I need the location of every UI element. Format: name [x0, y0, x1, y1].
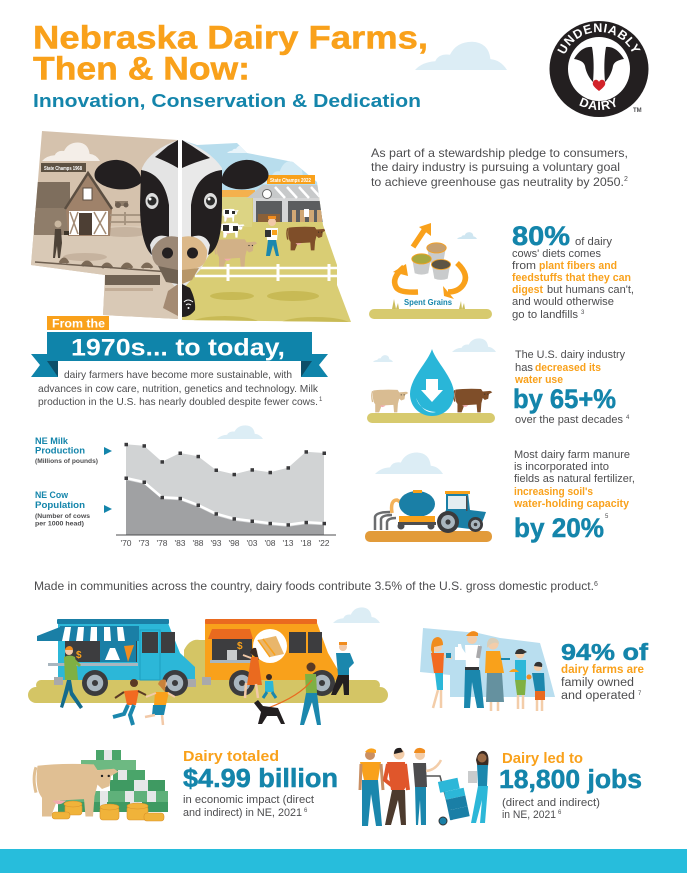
illustration: Nebraska then and now with cow: [31, 131, 351, 322]
stat: soil water-holding capacity: Most dairy farm manure: [514, 449, 630, 461]
stewardship pledge text: to achieve greenhouse gas neutrality by 2050.: [371, 175, 624, 189]
area: cows: [126, 480, 324, 535]
illustration: cow with money: [34, 750, 168, 821]
stat: 80%: from: [512, 260, 536, 272]
person: woman with clipboard: [468, 751, 488, 823]
legend: cow population: NE Cow: [35, 490, 69, 500]
stat: soil water-holding capacity: fields as natural fertilizer,: [514, 473, 635, 485]
stat: 80%: 3: [581, 310, 585, 316]
stat: water use: 4: [626, 415, 630, 421]
area: milk: [126, 444, 324, 535]
illustration: food trucks: [28, 607, 388, 725]
tag: From the: From the: [52, 318, 105, 330]
stat: water use: decreased its: [535, 362, 601, 374]
x axis labels: '08: [264, 538, 276, 548]
stat: 80%: feedstuffs that they can: [512, 272, 631, 284]
stat: 94% family owned: 7: [638, 691, 642, 697]
GDP sentence: 6: [594, 581, 598, 588]
person: worker in yellow: [360, 748, 383, 826]
stat: 94% family owned: and operated: [561, 690, 635, 702]
header cloud: [415, 42, 507, 70]
legend: milk production: Production: [35, 446, 85, 456]
legend: cow population: per 1000 head): [35, 520, 84, 528]
blue truck: $: [76, 650, 82, 661]
x axis labels: '70: [120, 538, 132, 548]
stat: water use: The U.S. dairy industry: [515, 349, 626, 361]
person: boy: [526, 662, 545, 711]
stat: 80%: cows' diets comes: [512, 248, 602, 260]
stat: 18,800 jobs: [499, 750, 642, 821]
x axis labels: '93: [210, 538, 222, 548]
x axis labels: '98: [228, 538, 240, 548]
stat: 18,800 jobs: 6: [558, 810, 562, 816]
x axis: [116, 534, 336, 536]
stewardship pledge text: [371, 146, 628, 189]
person: running boy: [113, 679, 146, 725]
x axis labels: '78: [156, 538, 168, 548]
stat: water use: by 65+%: [513, 384, 616, 414]
icon: milk jug: [455, 644, 466, 660]
cow face left (then): [95, 140, 178, 316]
stat: $4.99 billion: in economic impact (direct: [183, 794, 314, 806]
stat: water use: water use: [514, 374, 563, 386]
stat: soil water-holding capacity: [513, 449, 635, 543]
stat: water use: [513, 349, 630, 426]
icon: spent grains recycling: [369, 223, 492, 319]
stat: 18,800 jobs: (direct and indirect): [502, 797, 600, 809]
orange truck: [202, 619, 338, 696]
x axis labels: '88: [192, 538, 204, 548]
stat: 80%: of dairy: [575, 236, 613, 248]
stat: 80%: [512, 221, 634, 321]
banner headline: 1970s... to today,: [71, 334, 285, 362]
stat: $4.99 billion: Dairy totaled: [183, 748, 279, 765]
stat: 80%: but humans can't,: [547, 284, 634, 296]
legend: milk production: [35, 436, 112, 465]
legend: milk production: NE Milk: [35, 436, 69, 446]
title: Nebraska Dairy Farms,: [33, 20, 428, 56]
hand truck with boxes: [426, 776, 470, 825]
stewardship pledge text: As part of a stewardship pledge to consumers,: [371, 146, 628, 160]
x axis labels: '22: [318, 538, 330, 548]
person: man with ice cream: [60, 646, 83, 709]
GDP sentence: Made in communities across the country, dairy foods contribute 3.5% of the U.S. gross domestic product.: [34, 579, 594, 593]
stat: 94% family owned: dairy farms are: [561, 664, 644, 676]
stat: soil water-holding capacity: water-holding capacity: [513, 498, 629, 510]
blue truck: [37, 619, 196, 696]
orange truck: $: [237, 641, 243, 652]
legend: cow population: Population: [35, 500, 85, 510]
stat: soil water-holding capacity: by 20%: [514, 513, 604, 543]
markers: [124, 443, 326, 527]
coins: [52, 801, 164, 821]
x axis labels: '18: [300, 538, 312, 548]
stewardship pledge text: the dairy industry is pursuing a voluntary goal: [371, 160, 620, 174]
stat: $4.99 billion: and indirect) in NE, 2021: [183, 807, 302, 819]
stat: 18,800 jobs: 18,800 jobs: [499, 766, 642, 794]
tag: From the: [47, 316, 109, 330]
panel: 2022 farm: [182, 140, 351, 322]
sign: State Champs 1968: State Champs 1968: [44, 166, 82, 172]
subtitle: Innovation, Conservation & Dedication: [33, 91, 421, 111]
stat: $4.99 billion: [183, 748, 338, 819]
logo: Undeniably Dairy: [550, 21, 648, 117]
person: worker with hand truck: [413, 748, 441, 825]
grass: [392, 299, 465, 309]
stat: 18,800 jobs: Dairy led to: [502, 750, 583, 767]
intro text: production in the U.S. has nearly doubled despite fewer cows.: [38, 396, 318, 408]
stat: soil water-holding capacity: 5: [605, 514, 609, 520]
cow: [34, 764, 118, 817]
intro text: [38, 369, 323, 408]
person: worker in plaid: [385, 748, 408, 825]
illustration: workers: [360, 748, 488, 826]
stat: 94% family owned: family owned: [561, 677, 634, 689]
stat: $4.99 billion: $4.99 billion: [183, 765, 338, 793]
icon: water drop with cows: [367, 338, 496, 423]
intro text: advances in cow care, nutrition, genetics and technology. Milk: [38, 383, 319, 395]
logo: Undeniably Dairy: DAIRY: [579, 98, 616, 110]
person: running girl: [145, 680, 175, 725]
x axis labels: '83: [174, 538, 186, 548]
stat: 80%: and would otherwise: [512, 296, 614, 308]
title: [33, 20, 428, 86]
x axis labels: '03: [246, 538, 258, 548]
person: grandmother: [485, 638, 510, 711]
logo: Undeniably Dairy: TM: [633, 108, 642, 114]
cow face right (now): [182, 140, 268, 290]
title: Then & Now:: [33, 50, 250, 86]
stat: 80%: digest: [512, 284, 543, 296]
icon: smart collar with wifi: [182, 284, 195, 317]
line: cows: [126, 478, 324, 525]
sign: State Champs 1968: [41, 163, 86, 172]
x axis labels: [120, 538, 330, 548]
person: man in cap: [331, 642, 354, 695]
stat: 94% family owned: [561, 639, 648, 702]
panel: 1968 farm: [31, 131, 178, 319]
logo: Undeniably Dairy: UNDENIABLY: [557, 23, 641, 54]
money stacks: [58, 750, 168, 812]
chart cloud: [217, 425, 263, 439]
label: spent grains: Spent Grains: [404, 297, 452, 307]
icon: dog: [254, 700, 285, 724]
person: girl: [509, 649, 527, 709]
stat: $4.99 billion: 6: [304, 808, 308, 814]
recycle arrows: [395, 229, 465, 292]
footer band: [0, 849, 687, 873]
stewardship pledge text: 2: [624, 176, 628, 183]
stat: soil water-holding capacity: increasing soil's: [514, 486, 593, 498]
banner: From the 1970s to today: [31, 316, 328, 377]
stat: soil water-holding capacity: is incorporated into: [514, 461, 609, 473]
legend: cow population: (Number of cows: [35, 513, 90, 520]
person: woman in orange dress: [243, 648, 262, 698]
person: man: [464, 631, 484, 708]
icon: tractor spreading manure: [365, 453, 492, 542]
legend: milk production: (Millions of pounds): [35, 458, 98, 465]
stat: water use: has: [515, 362, 534, 374]
person: small child: [263, 674, 276, 698]
stat: 18,800 jobs: in NE, 2021: [502, 809, 556, 821]
stat: 80%: 80%: [512, 221, 570, 251]
stat: 94% family owned: 94% of: [561, 639, 648, 665]
chart: NE milk production and cow population: [35, 425, 336, 548]
intro text: dairy farmers have become more sustainable, with: [64, 369, 292, 381]
intro text: 1: [319, 397, 323, 403]
x axis labels: '13: [282, 538, 294, 548]
person: woman walking dog: [268, 662, 321, 725]
stat: 80%: go to landfills: [512, 309, 579, 321]
legend: cow population: [35, 490, 112, 528]
stat: water use: over the past decades: [515, 414, 624, 426]
sign: State Champs 2022: [267, 175, 315, 184]
road: [28, 640, 388, 703]
x axis labels: '73: [138, 538, 150, 548]
stat: 80%: plant fibers and: [539, 260, 617, 272]
sign: State Champs 2022: State Champs 2022: [270, 178, 311, 184]
illustration: Nebraska family: [420, 628, 555, 711]
person: woman: [431, 637, 452, 708]
